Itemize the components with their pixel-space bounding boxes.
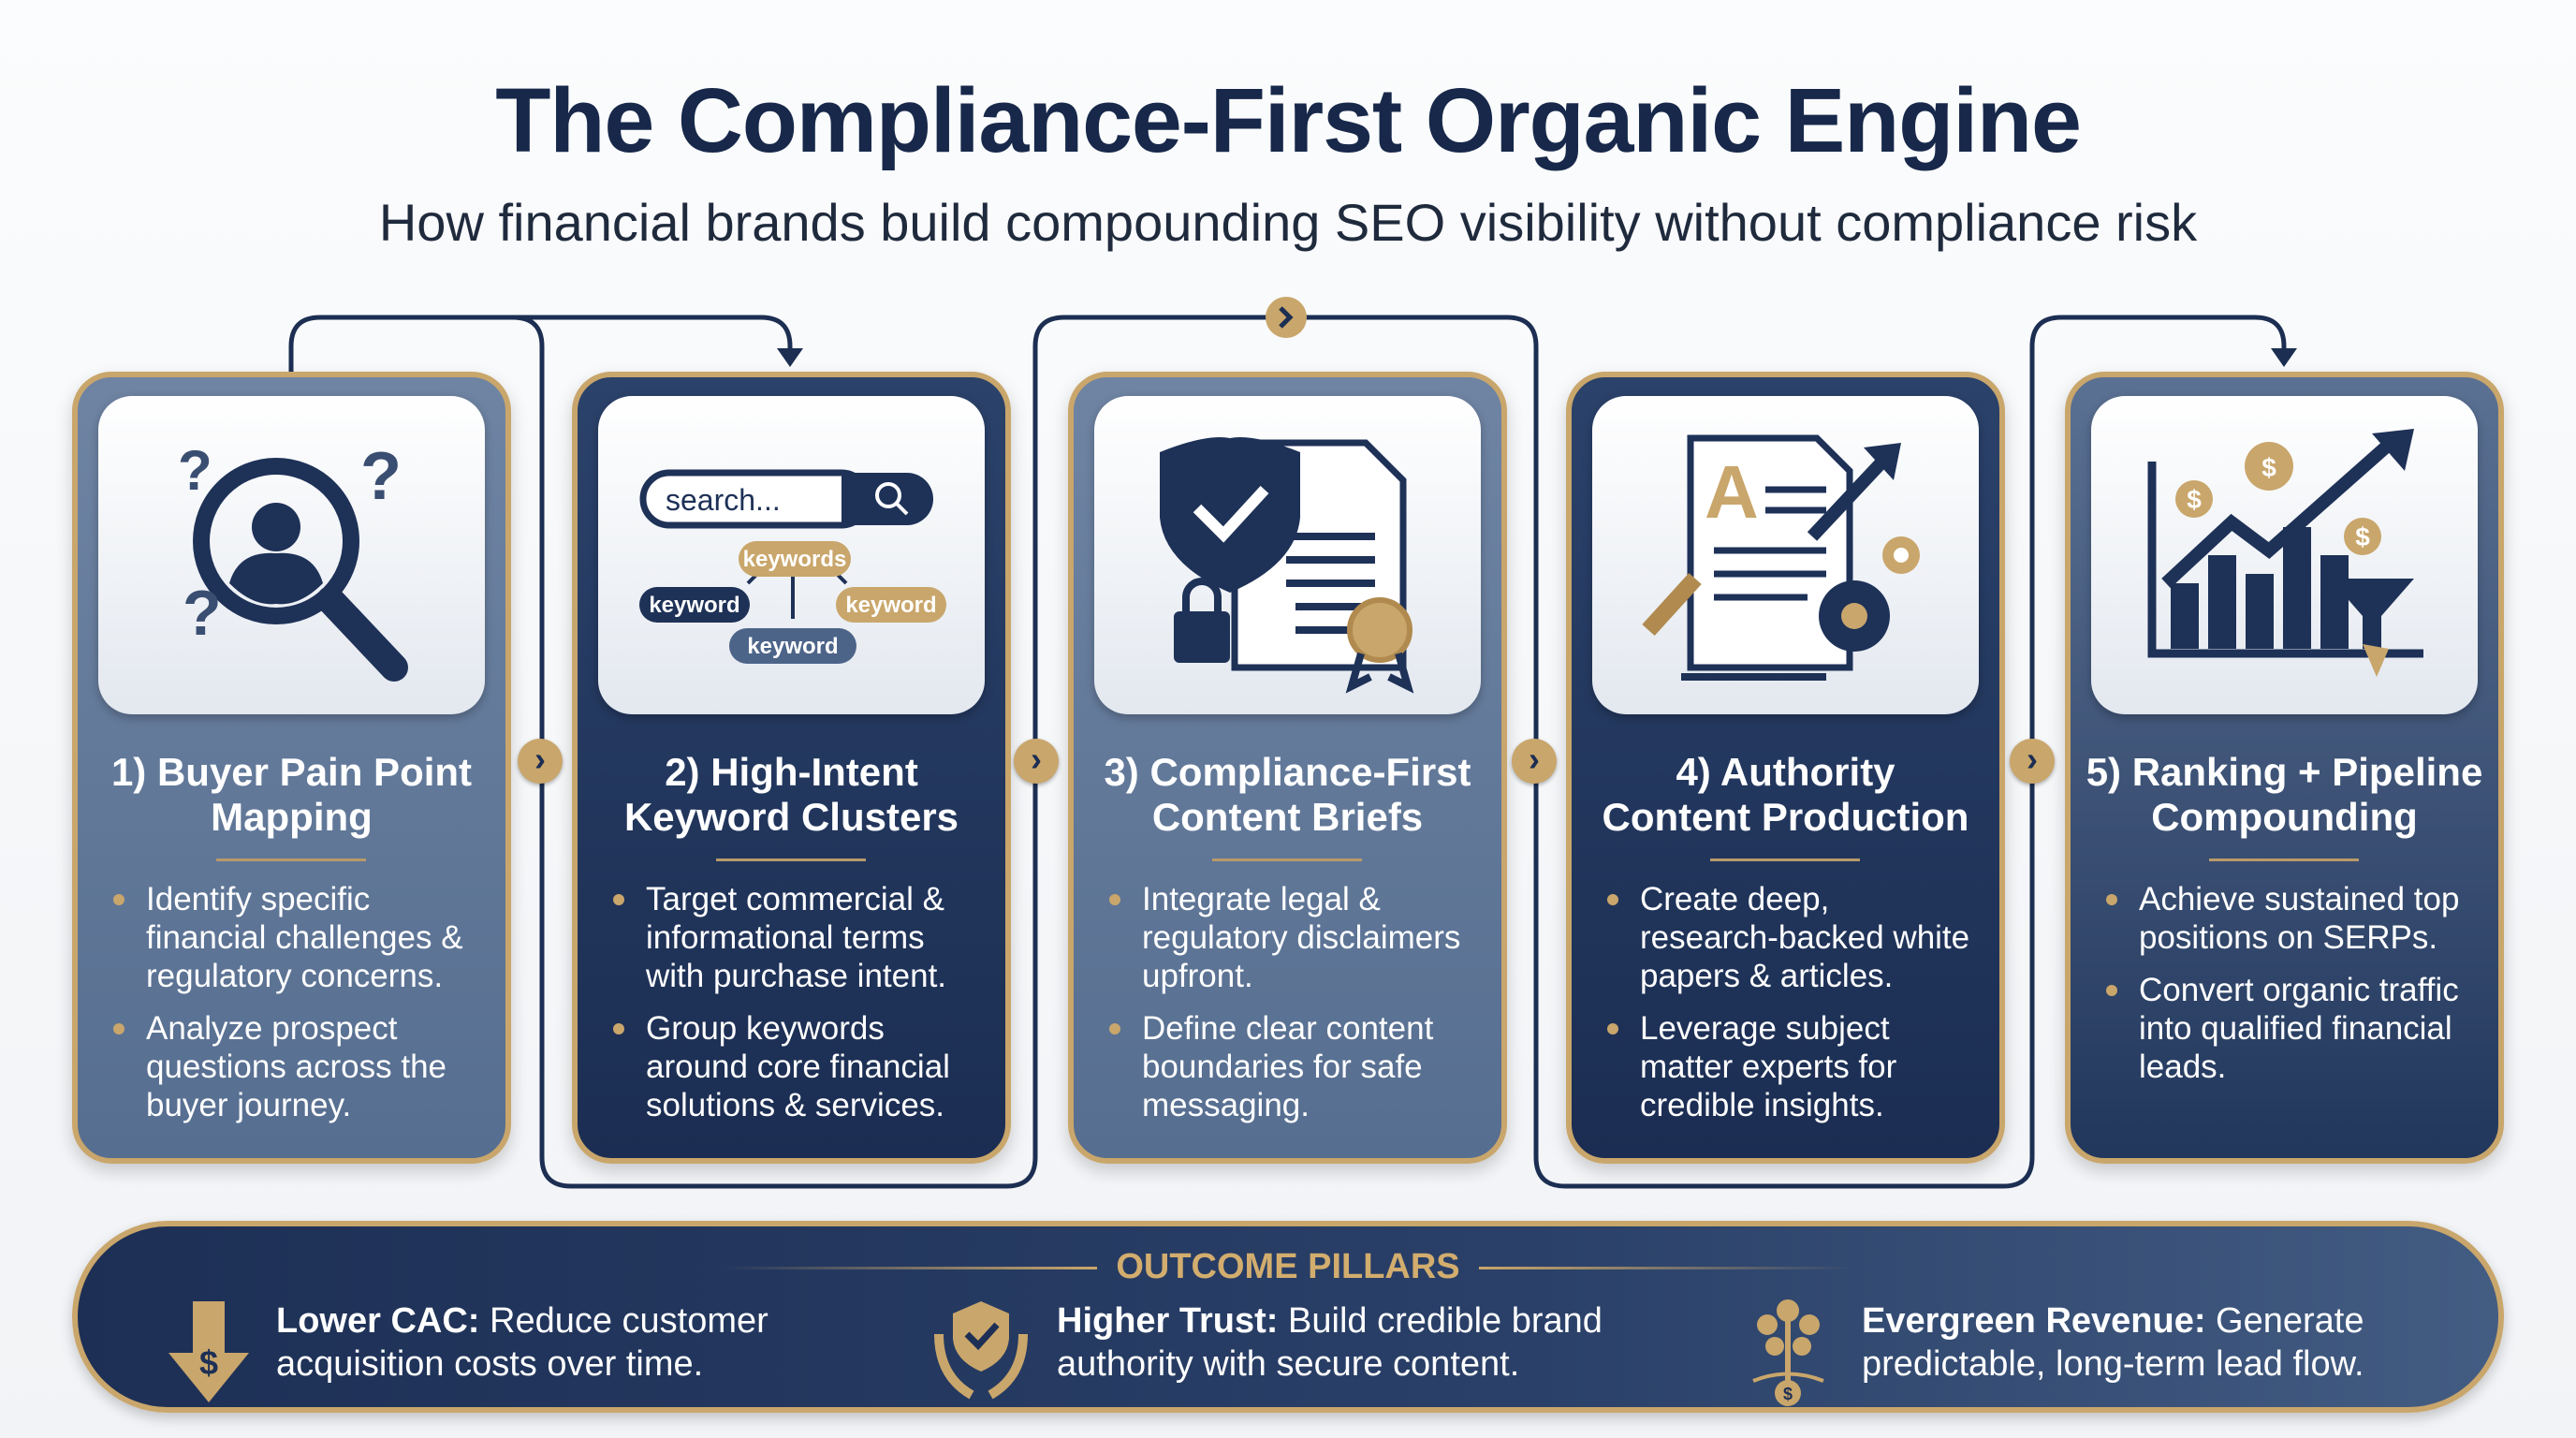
bullets: around core financial bbox=[646, 1049, 950, 1085]
icon: money tree: $ bbox=[1783, 1385, 1793, 1403]
heading bbox=[1104, 750, 1471, 839]
bullets: research-backed white bbox=[1640, 919, 1969, 956]
icon: magnifier person bbox=[98, 396, 485, 714]
icon: down arrow dollar bbox=[168, 1301, 249, 1402]
heading bbox=[1603, 750, 1969, 839]
icon: magnifier person: ? bbox=[183, 578, 222, 649]
heading: 3) Compliance-First bbox=[1104, 750, 1471, 794]
panel: step 4 bbox=[1566, 372, 2005, 1164]
heading: Content Briefs bbox=[1152, 795, 1423, 839]
bullets: Create deep, bbox=[1640, 881, 1829, 917]
icon: chevron 4 bbox=[2010, 739, 2055, 784]
icon: chevron 1 bbox=[518, 739, 563, 784]
panel: outcome pillars bbox=[72, 1221, 2504, 1413]
icon: hands shield bbox=[934, 1301, 1028, 1399]
icon: chevron 2: › bbox=[1031, 740, 1042, 778]
bullets: papers & articles. bbox=[1640, 958, 1893, 994]
bullets: credible insights. bbox=[1640, 1087, 1884, 1123]
text: higher trust bbox=[1057, 1301, 1603, 1384]
text: higher trust: authority with secure content. bbox=[1057, 1344, 1519, 1384]
bullets bbox=[113, 881, 463, 1123]
icon: growth chart: $ bbox=[2187, 485, 2202, 514]
icon: search keywords: keyword bbox=[845, 593, 937, 618]
icon: chevron 3 bbox=[1512, 739, 1557, 784]
icon: search keywords: search... bbox=[666, 483, 781, 517]
heading: Content Production bbox=[1603, 795, 1969, 839]
bullets bbox=[1607, 881, 1969, 1123]
heading: Compounding bbox=[2151, 795, 2418, 839]
bullets: Achieve sustained top bbox=[2139, 881, 2459, 917]
text: evergreen revenue: predictable, long-term lead flow. bbox=[1862, 1344, 2364, 1384]
bullets: solutions & services. bbox=[646, 1087, 944, 1123]
bullets: positions on SERPs. bbox=[2139, 919, 2437, 956]
bullets: matter experts for bbox=[1640, 1049, 1896, 1085]
heading: 1) Buyer Pain Point bbox=[111, 750, 472, 794]
icon: chevron 1: › bbox=[534, 740, 546, 778]
icon: magnifier person: ? bbox=[178, 439, 212, 502]
text: lower cac bbox=[276, 1301, 768, 1384]
text: evergreen revenue: Evergreen Revenue: Generate bbox=[1862, 1301, 2364, 1341]
heading bbox=[111, 750, 472, 839]
bullets bbox=[1109, 881, 1460, 1123]
icon: search keywords: keyword bbox=[649, 593, 740, 618]
icon: search keywords bbox=[598, 396, 985, 714]
icon: chevron 4: › bbox=[2027, 740, 2038, 778]
heading: 4) Authority bbox=[1676, 750, 1895, 794]
bullets: upfront. bbox=[1142, 958, 1253, 994]
bullets: regulatory disclaimers bbox=[1142, 919, 1460, 956]
icon: authority content: A bbox=[1705, 450, 1759, 534]
bullets: messaging. bbox=[1142, 1087, 1310, 1123]
title: The Compliance-First Organic Engine bbox=[495, 69, 2081, 171]
bullets: Identify specific bbox=[146, 881, 370, 917]
heading: outcome pillars bbox=[741, 1247, 1833, 1286]
bullets: informational terms bbox=[646, 919, 925, 956]
icon: money tree bbox=[1752, 1299, 1824, 1406]
bullets: Leverage subject bbox=[1640, 1010, 1890, 1047]
bullets bbox=[2106, 881, 2459, 1085]
bullets: Define clear content bbox=[1142, 1010, 1433, 1047]
icon: shield document bbox=[1094, 396, 1481, 714]
icon: down arrow dollar: $ bbox=[199, 1343, 218, 1382]
bullets: buyer journey. bbox=[146, 1087, 351, 1123]
panel: step 5 bbox=[2065, 372, 2504, 1164]
text: lower cac: acquisition costs over time. bbox=[276, 1344, 703, 1384]
bullets: with purchase intent. bbox=[646, 958, 946, 994]
heading: outcome pillars: OUTCOME PILLARS bbox=[1116, 1247, 1460, 1286]
bullets: leads. bbox=[2139, 1049, 2226, 1085]
bullets: Convert organic traffic bbox=[2139, 972, 2459, 1008]
icon: growth chart: $ bbox=[2355, 522, 2370, 551]
bullets bbox=[613, 881, 950, 1123]
panel: step 2 bbox=[572, 372, 1011, 1164]
heading bbox=[2086, 750, 2482, 839]
bullets: financial challenges & bbox=[146, 919, 463, 956]
icon: growth chart bbox=[2091, 396, 2478, 714]
bullets: Group keywords bbox=[646, 1010, 885, 1047]
heading: 5) Ranking + Pipeline bbox=[2086, 750, 2482, 794]
heading: 2) High-Intent bbox=[665, 750, 918, 794]
bullets: boundaries for safe bbox=[1142, 1049, 1423, 1085]
panel: step 1 bbox=[72, 372, 511, 1164]
icon: search keywords: keywords bbox=[743, 547, 846, 572]
icon: chevron 3: › bbox=[1529, 740, 1540, 778]
bullets: questions across the bbox=[146, 1049, 446, 1085]
text: lower cac: Lower CAC: Reduce customer bbox=[276, 1301, 768, 1341]
bullets: Integrate legal & bbox=[1142, 881, 1381, 917]
heading: Keyword Clusters bbox=[624, 795, 959, 839]
heading: Mapping bbox=[211, 795, 373, 839]
bullets: Target commercial & bbox=[646, 881, 944, 917]
icon: authority content bbox=[1592, 396, 1979, 714]
panel: step 3 bbox=[1068, 372, 1507, 1164]
text: higher trust: Higher Trust: Build credible brand bbox=[1057, 1301, 1603, 1341]
bullets: regulatory concerns. bbox=[146, 958, 443, 994]
bullets: into qualified financial bbox=[2139, 1010, 2452, 1047]
bullets: Analyze prospect bbox=[146, 1010, 397, 1047]
icon: growth chart: $ bbox=[2261, 453, 2276, 482]
icon: magnifier person: ? bbox=[360, 439, 402, 514]
icon: chevron 2 bbox=[1014, 739, 1059, 784]
heading bbox=[624, 750, 959, 839]
subtitle: How financial brands build compounding SEO visibility without compliance risk bbox=[379, 193, 2197, 252]
text: evergreen revenue bbox=[1862, 1301, 2364, 1384]
icon: search keywords: keyword bbox=[747, 634, 839, 659]
